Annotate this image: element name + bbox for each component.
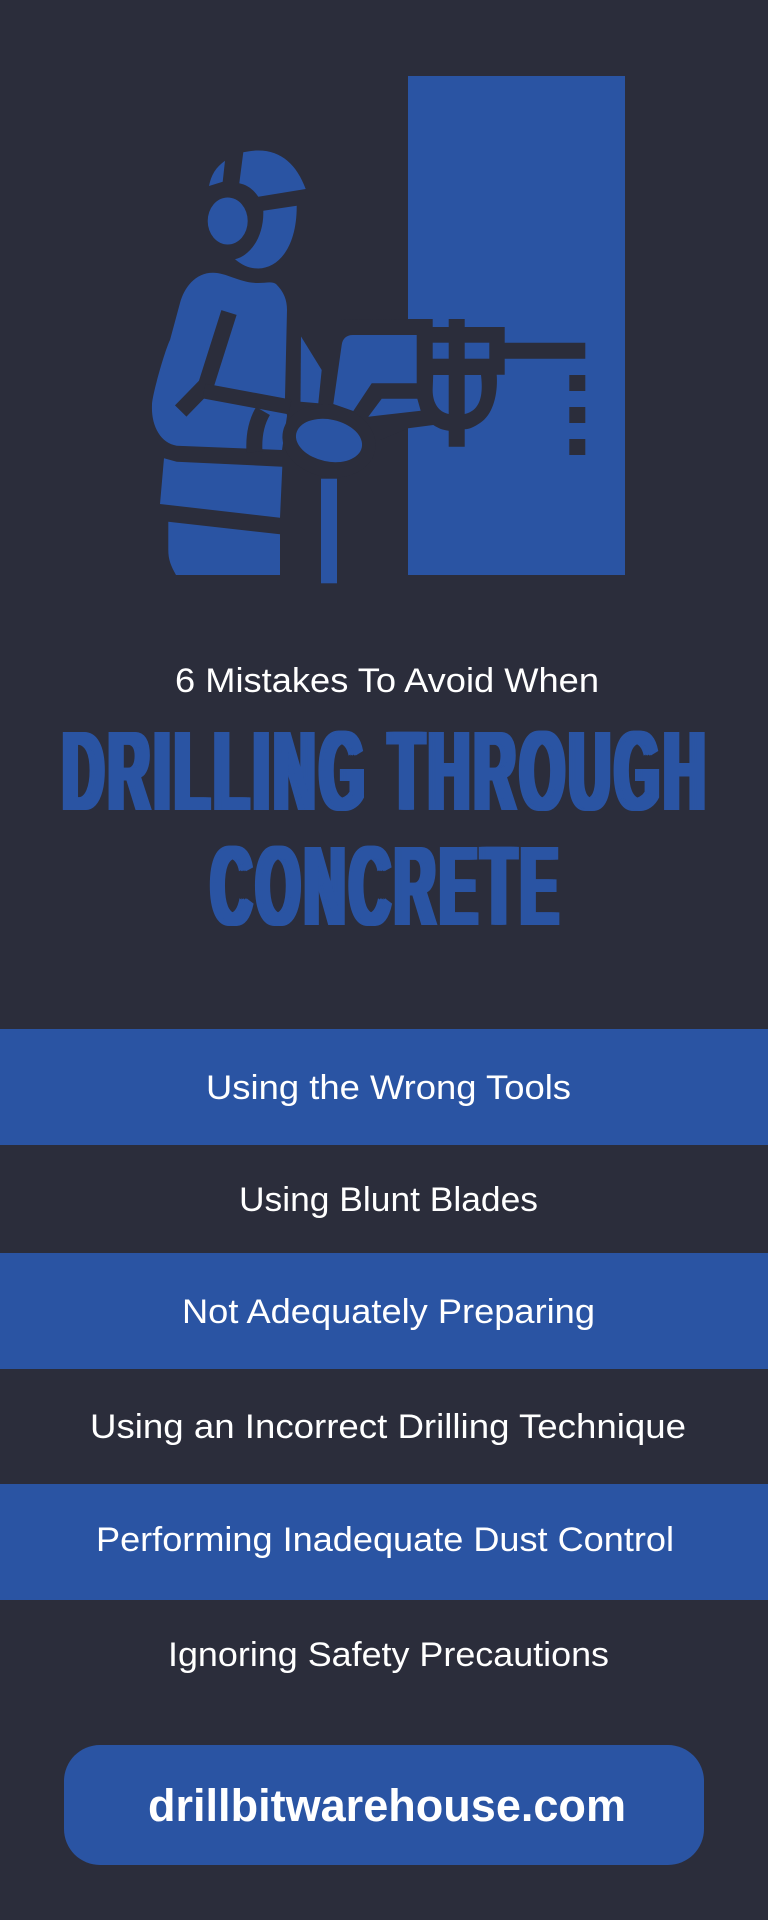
band 5: Performing Inadequate Dust Control [96,1521,674,1559]
band 5 [0,1484,768,1600]
arm lines [181,312,290,452]
band 3 [0,1253,768,1369]
title [62,708,710,949]
band 1: Using the Wrong Tools [206,1069,571,1107]
wall [408,76,625,575]
subtitle: 6 Mistakes To Avoid When [175,662,599,700]
row 2: Using Blunt Blades [239,1181,538,1219]
row 4: Using an Incorrect Drilling Technique [90,1408,686,1446]
hand [292,413,366,468]
drill outline [340,319,585,447]
hand ring [276,396,382,486]
website pill [64,1745,704,1865]
row 6: Ignoring Safety Precautions [168,1636,609,1674]
band 1 [0,1029,768,1145]
illustration: worker drilling into concrete wall [152,76,625,583]
drill parts [300,335,489,417]
worker torso [152,273,287,450]
mistakes list [0,1029,768,1674]
stand post [321,479,337,583]
drill holes in wall [569,375,585,455]
legs [160,458,282,575]
band 3: Not Adequately Preparing [182,1293,595,1331]
website pill: drillbitwarehouse.com [148,1780,626,1831]
head and ear defenders [208,150,306,268]
